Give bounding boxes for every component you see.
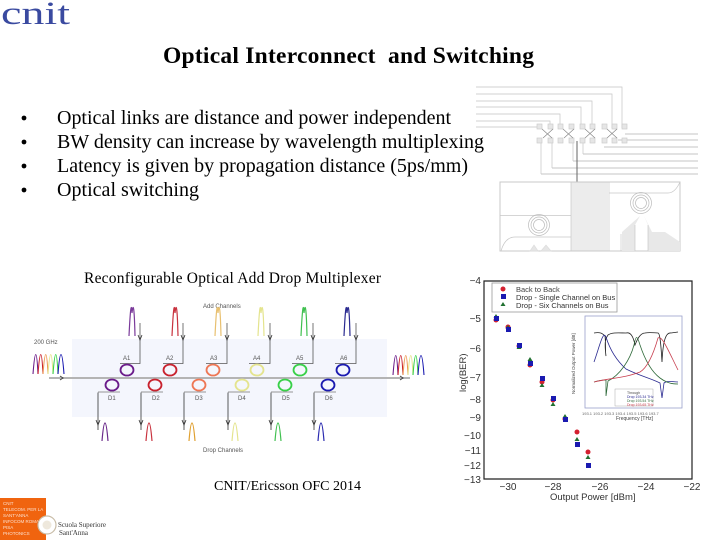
chart: x axis ticks: −24 xyxy=(638,482,655,493)
schematic: lower feed lines xyxy=(541,141,583,174)
chart: y axis ticks xyxy=(464,276,481,486)
logo block: orange institute tag xyxy=(0,498,46,540)
schematic: ring detail panel xyxy=(500,182,680,251)
caption: source: CNIT/Ericsson OFC 2014 xyxy=(214,479,361,494)
label: reconfigurable multiplexer: Reconfigurable Optical Add Drop Multiplexer xyxy=(84,270,382,287)
bullet list: Optical switching xyxy=(57,179,199,201)
chart: y axis ticks: −5 xyxy=(470,314,481,325)
ROADM: labels: Add Channels xyxy=(203,304,241,310)
chart: inset spectrum: Through xyxy=(627,391,640,395)
ROADM: labels: A2 xyxy=(166,356,174,362)
logo block: orange institute tag: SANT'ANNA xyxy=(3,513,28,518)
chart: y axis ticks: −6 xyxy=(470,344,481,355)
ROADM: input spectrum xyxy=(33,354,64,374)
chart: data points xyxy=(494,314,591,468)
ROADM: labels: A5 xyxy=(296,356,304,362)
ROADM: bus waveguide xyxy=(49,376,410,380)
switch schematic xyxy=(476,87,698,251)
chart: x axis ticks: −28 xyxy=(545,482,562,493)
chart: y axis ticks: −7 xyxy=(470,373,481,384)
chart: y axis ticks: −13 xyxy=(464,475,481,486)
ROADM diagram xyxy=(33,304,424,454)
title: Optical Interconnect and Switching xyxy=(163,43,534,69)
chart: y axis title: log(BER) xyxy=(458,353,469,392)
chart: inset spectrum: Drop 193.34 THz xyxy=(627,395,654,399)
schematic: output lines xyxy=(541,134,698,174)
logo block: orange institute tag: TELECOM. PER LA xyxy=(3,507,43,512)
chart: x axis ticks: −26 xyxy=(592,482,609,493)
chart: legend: Drop - Six Channels on Bus xyxy=(516,301,609,310)
chart: x axis ticks: −22 xyxy=(684,482,701,493)
ROADM: background panel xyxy=(72,339,387,417)
logo block: orange institute tag: CNIT xyxy=(3,501,14,506)
ROADM: labels: D6 xyxy=(325,396,333,402)
ROADM: drop rings xyxy=(106,380,334,390)
logo block: orange institute tag: INFOCOM ROMA xyxy=(3,519,39,524)
chart: y axis ticks: −11 xyxy=(465,446,481,457)
chart: legend: Back to Back xyxy=(516,285,560,294)
chart: y axis ticks: −9 xyxy=(470,413,481,424)
bullet list: BW density can increase by wavelength multiplexing xyxy=(57,131,484,153)
ROADM: labels: D2 xyxy=(152,396,160,402)
bullet list: Optical links are distance and power independent xyxy=(57,107,451,129)
chart: frame xyxy=(484,281,692,479)
schematic: crossing links xyxy=(542,129,617,138)
ROADM: labels: D5 xyxy=(282,396,290,402)
ROADM: labels: A6 xyxy=(340,356,348,362)
ROADM: add rings xyxy=(120,364,350,376)
chart: inset spectrum: Frequency [THz] xyxy=(616,416,654,422)
chart: inset spectrum xyxy=(571,316,682,422)
ROADM: labels xyxy=(34,304,348,454)
chart: legend xyxy=(492,283,617,312)
ROADM: labels: A4 xyxy=(253,356,261,362)
logo: Scuola Superiore Sant'Anna: Sant'Anna xyxy=(59,528,89,537)
chart: y axis ticks: −10 xyxy=(464,431,481,442)
chart: inset spectrum: Drop 193.54 THz xyxy=(627,399,654,403)
chart: inset spectrum: Normalized Output Power [dB] xyxy=(571,333,576,394)
ROADM: add and drop arrows xyxy=(96,323,358,430)
ROADM: labels: Drop Channels xyxy=(203,448,243,454)
ROADM: labels: A1 xyxy=(123,356,131,362)
chart: inset spectrum: 193.1 193.2 193.3 193.4 193.5 193.6 193.7 xyxy=(582,411,660,416)
ROADM: labels: D4 xyxy=(238,396,246,402)
schematic: input lines xyxy=(476,87,622,128)
ROADM: labels: 200 GHz xyxy=(34,340,58,346)
logo block: orange institute tag: PISA xyxy=(3,525,13,530)
bullet list: Latency is given by propagation distance (5ps/mm) xyxy=(57,155,468,177)
chart: x axis ticks: −30 xyxy=(500,482,517,493)
logo: Scuola Superiore Sant'Anna xyxy=(38,516,107,537)
chart: inset spectrum: Drop 193.65 THz xyxy=(627,403,654,407)
ROADM: add spectra xyxy=(129,308,350,336)
logo block: orange institute tag: PHOTONICS xyxy=(3,531,30,536)
schematic: switch cells xyxy=(537,124,627,143)
chart: y axis ticks: −12 xyxy=(464,461,481,472)
ROADM: output spectrum xyxy=(393,356,424,375)
ROADM: labels: D1 xyxy=(108,396,116,402)
logo: Scuola Superiore Sant'Anna: Scuola Superiore xyxy=(58,520,107,529)
ROADM: labels: A3 xyxy=(210,356,218,362)
chart: y axis ticks: −8 xyxy=(470,395,481,406)
chart: y axis ticks: −4 xyxy=(470,276,481,287)
bullet list xyxy=(22,107,484,201)
BER chart xyxy=(458,276,701,503)
chart: x axis ticks xyxy=(500,482,701,493)
ROADM: labels: D3 xyxy=(195,396,203,402)
chart: x axis title: Output Power [dBm] xyxy=(550,492,636,503)
chart: legend: Drop - Single Channel on Bus xyxy=(516,293,615,302)
ROADM: drop spectra xyxy=(102,423,324,441)
